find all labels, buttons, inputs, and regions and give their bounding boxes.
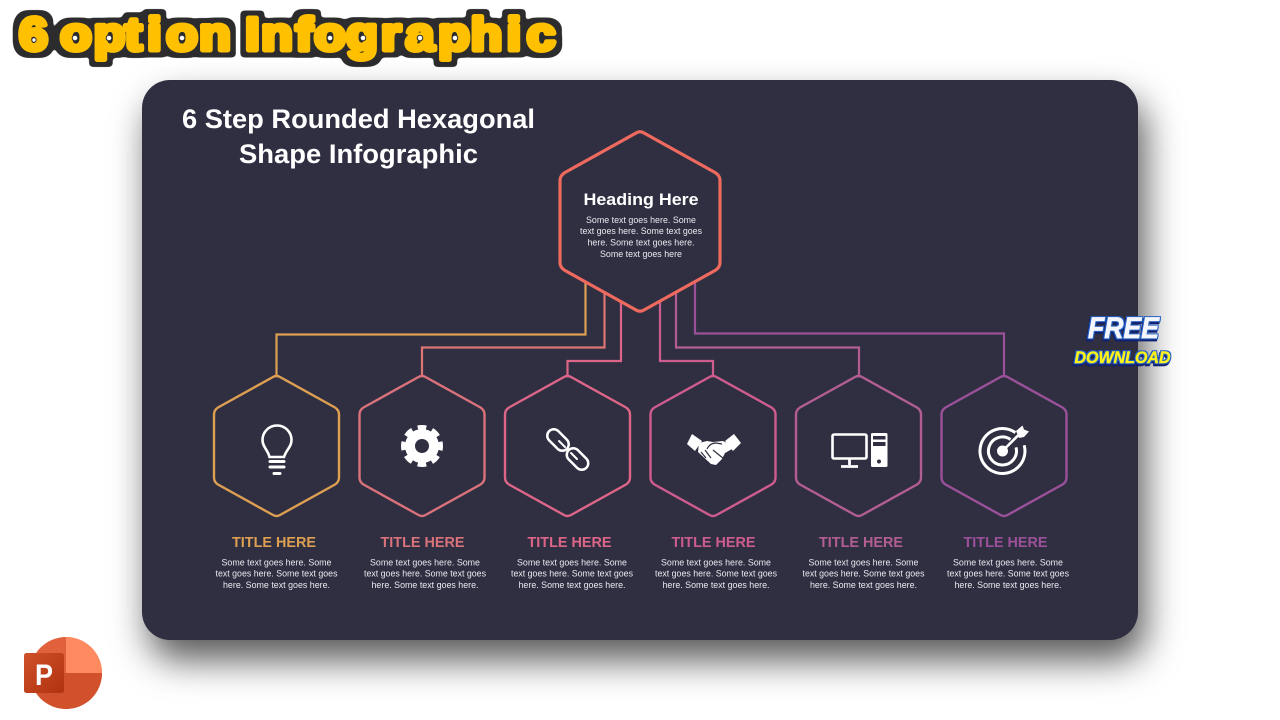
step 3 title: TITLE HERE — [528, 534, 612, 551]
free download badge — [1074, 312, 1170, 367]
step 2 text — [364, 558, 486, 590]
step 5 text — [802, 558, 925, 590]
step 2 hexagon — [360, 376, 484, 516]
step 4 text: Some text goes here. Some — [661, 558, 771, 568]
icon: desktop computer — [832, 433, 888, 467]
step 2 text: here. Some text goes here. — [372, 580, 478, 590]
connector 4 — [660, 300, 713, 376]
step 3 hexagon — [505, 376, 630, 516]
step 1 text: here. Some text goes here. — [223, 580, 330, 590]
connector 3 — [568, 300, 621, 376]
icon: handshake — [687, 434, 741, 465]
panel heading: 6 Step Rounded Hexagonal — [182, 104, 535, 134]
icon: PowerPoint logo: P — [35, 659, 53, 692]
connector 5 — [676, 290, 859, 376]
free download badge: DOWNLOAD — [1074, 348, 1170, 367]
step 4 text: here. Some text goes here. — [662, 580, 770, 590]
step 4 title: TITLE HERE — [672, 534, 756, 551]
panel heading — [182, 104, 535, 169]
step 5 hexagon — [796, 376, 921, 516]
step 2 text: Some text goes here. Some — [370, 558, 480, 568]
step 5 text: text goes here. Some text goes — [802, 568, 925, 578]
step 5 title: TITLE HERE — [819, 534, 903, 551]
panel: dark background card — [142, 80, 1138, 640]
central body text: Some text goes here. Some — [586, 215, 696, 225]
step 1 text — [216, 558, 338, 590]
central body text: text goes here. Some text goes — [580, 226, 702, 236]
icon: gear — [400, 424, 444, 468]
connector 6 — [695, 280, 1004, 376]
step 2 text: text goes here. Some text goes — [364, 568, 486, 578]
step 1 title: TITLE HERE — [232, 534, 316, 551]
step 3 text: Some text goes here. Some — [517, 558, 627, 568]
connector 2 — [422, 290, 604, 376]
central heading: Heading Here — [584, 190, 698, 209]
central body text: here. Some text goes here. — [588, 238, 694, 248]
free download badge: FREE — [1088, 312, 1160, 345]
step 3 text: text goes here. Some text goes — [511, 568, 633, 578]
icon: target with arrow — [980, 426, 1029, 474]
step 4 hexagon — [650, 376, 776, 516]
step 6 title: TITLE HERE — [964, 534, 1048, 551]
central hexagon — [560, 132, 720, 311]
icon: light bulb — [262, 426, 292, 474]
step 1 hexagon — [214, 376, 339, 516]
step 2 title: TITLE HERE — [380, 534, 464, 551]
step 3 text: here. Some text goes here. — [518, 580, 626, 590]
step 5 text: Some text goes here. Some — [808, 558, 918, 568]
main title: 6 option Infographic — [19, 9, 555, 60]
step 4 text — [655, 558, 777, 590]
central body text — [580, 215, 702, 259]
step 5 text: here. Some text goes here. — [810, 580, 917, 590]
step 1 text: Some text goes here. Some — [222, 558, 332, 568]
connector 1 — [276, 280, 586, 376]
step 4 text: text goes here. Some text goes — [655, 568, 777, 578]
icon: PowerPoint logo — [24, 637, 102, 709]
step 1 text: text goes here. Some text goes — [216, 568, 338, 578]
step 6 text: Some text goes here. Some — [953, 558, 1063, 568]
step 6 hexagon — [942, 376, 1066, 516]
step 3 text — [511, 558, 633, 590]
panel heading: Shape Infographic — [239, 139, 478, 169]
central body text: Some text goes here — [600, 249, 682, 259]
icon: chain link — [545, 427, 591, 472]
step 6 text — [947, 558, 1069, 590]
step 6 text: text goes here. Some text goes — [947, 568, 1069, 578]
step 6 text: here. Some text goes here. — [954, 580, 1062, 590]
